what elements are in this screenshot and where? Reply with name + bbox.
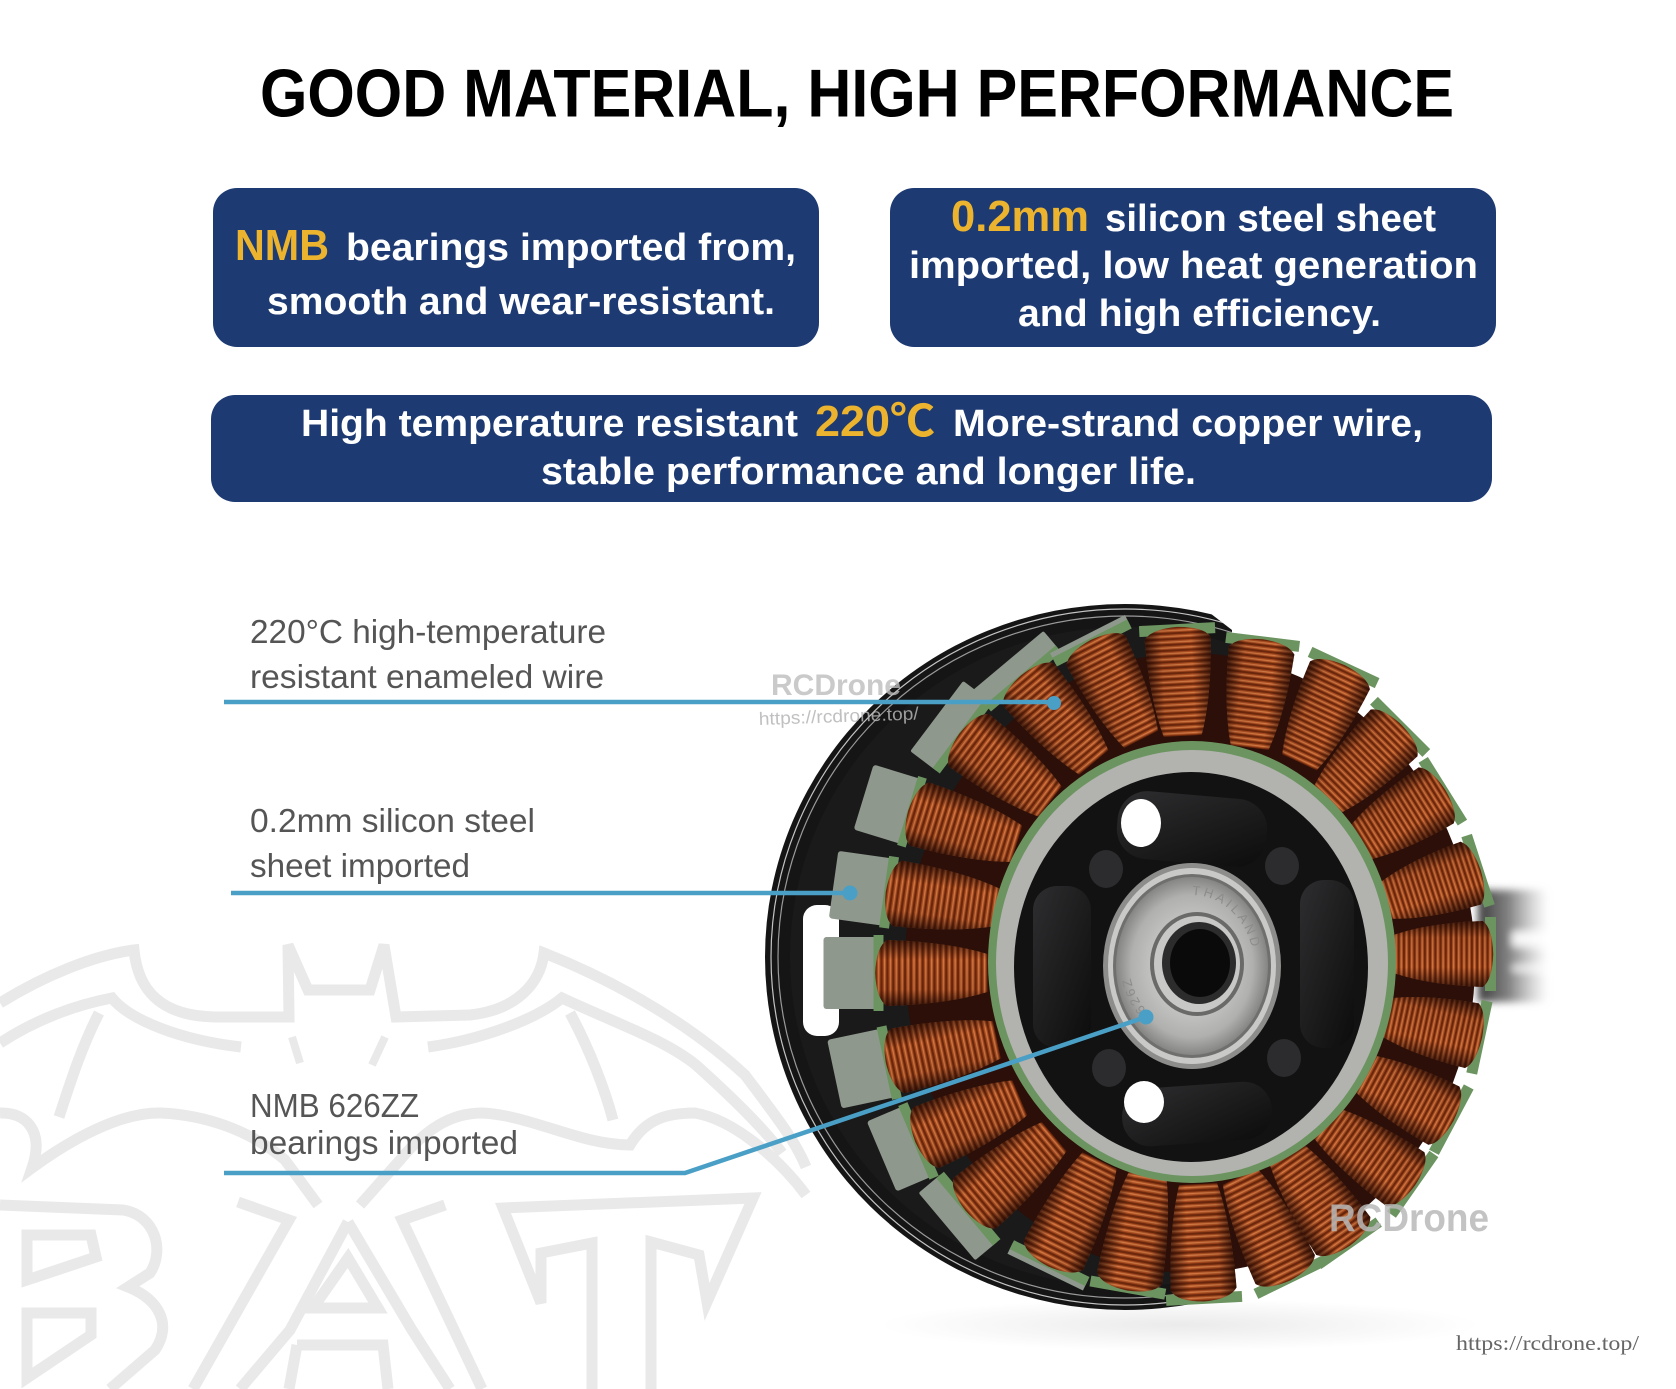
callout: silicon steel: sheet imported	[250, 847, 470, 884]
watermark: RCDrone upper	[758, 669, 919, 729]
hub window slots	[1033, 789, 1354, 1148]
screw holes	[1089, 847, 1301, 1087]
panel: copper wire: stable performance and longer life.	[541, 451, 1196, 493]
panel: NMB bearings	[213, 188, 819, 347]
panel: NMB bearings: smooth and wear-resistant.	[267, 281, 775, 323]
panel: silicon steel sheet: silicon steel sheet	[1105, 198, 1436, 240]
watermark: RCDrone upper: https://rcdrone.top/	[758, 703, 919, 729]
callout: NMB bearing: bearings imported	[250, 1124, 518, 1161]
black hub	[1014, 772, 1368, 1162]
panel: copper wire: 220℃	[815, 397, 935, 446]
panel: copper wire: High temperature resistant	[301, 403, 798, 445]
panel: copper wire	[211, 395, 1492, 502]
callout: enameled wire: 220°C high-temperature	[250, 613, 606, 650]
panel: silicon steel sheet: imported, low heat generation	[909, 245, 1478, 287]
callout: NMB bearing: NMB 626ZZ	[250, 1087, 419, 1124]
panel: silicon steel sheet: and high efficiency.	[1018, 293, 1381, 335]
panel: NMB bearings: bearings imported from,	[346, 227, 796, 269]
icon: output cable	[1478, 890, 1548, 1002]
callout: enameled wire	[224, 613, 1061, 710]
panel: silicon steel sheet	[890, 188, 1496, 347]
panel: silicon steel sheet: 0.2mm	[951, 192, 1089, 241]
rotor base disc	[765, 604, 1232, 1310]
watermark: RCDrone upper: RCDrone	[771, 669, 901, 702]
callout: silicon steel: 0.2mm silicon steel	[250, 802, 535, 839]
watermark: BAT logo	[0, 945, 806, 1389]
watermark: RCDrone lower: RCDrone	[1329, 1197, 1489, 1240]
bearing engraving: THAILAND	[1193, 886, 1259, 946]
bearing	[1103, 863, 1281, 1069]
ground shadow	[880, 1299, 1480, 1351]
panel: copper wire: More-strand copper wire,	[953, 403, 1423, 445]
motor photo illustration	[725, 604, 1545, 1340]
bearing: 626Z	[1122, 978, 1144, 1014]
see-through holes	[1121, 799, 1164, 1123]
stator core backing	[905, 653, 1475, 1273]
insulation and steel ring	[988, 741, 1396, 1183]
callout: enameled wire: resistant enameled wire	[250, 658, 604, 695]
callout: NMB bearing	[224, 1010, 1154, 1173]
panel: NMB bearings: NMB	[235, 221, 329, 270]
stator teeth and copper coils	[824, 615, 1496, 1306]
source url: https://rcdrone.top/	[1456, 1331, 1639, 1355]
title: GOOD MATERIAL, HIGH PERFORMANCE	[260, 56, 1454, 132]
callout: silicon steel	[231, 802, 858, 900]
